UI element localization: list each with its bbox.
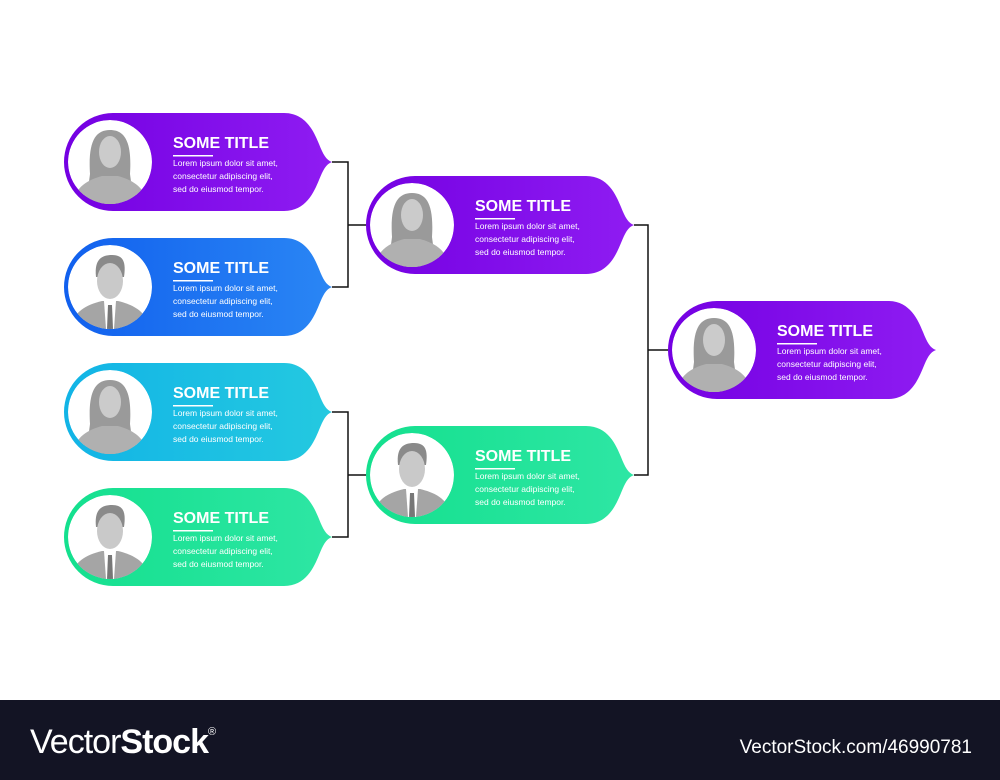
- card: left 2: consectetur adipiscing elit,: [173, 296, 273, 306]
- card: left 4: sed do eiusmod tempor.: [173, 559, 264, 569]
- card: left 1: sed do eiusmod tempor.: [173, 184, 264, 194]
- card: final: consectetur adipiscing elit,: [777, 359, 877, 369]
- card: left 2: SOME TITLE: [173, 260, 269, 277]
- card: left 2: Lorem ipsum dolor sit amet,: [173, 283, 278, 293]
- card: middle 2: Lorem ipsum dolor sit amet,: [475, 471, 580, 481]
- card: left 1: SOME TITLE: [173, 135, 269, 152]
- card: middle 1: SOME TITLE: [475, 198, 571, 215]
- card: left 2: sed do eiusmod tempor.: [173, 309, 264, 319]
- card: middle 2: SOME TITLE: [475, 448, 571, 465]
- card: final: SOME TITLE: [777, 323, 873, 340]
- card: middle 2: consectetur adipiscing elit,: [475, 484, 575, 494]
- card: middle 1: Lorem ipsum dolor sit amet,: [475, 221, 580, 231]
- card: middle 2: sed do eiusmod tempor.: [475, 497, 566, 507]
- footer bar: ®: [208, 726, 216, 738]
- card: left 3: sed do eiusmod tempor.: [173, 434, 264, 444]
- card: middle 2: [366, 426, 634, 524]
- card: left 1: [64, 113, 332, 211]
- card: left 4: Lorem ipsum dolor sit amet,: [173, 533, 278, 543]
- card: left 3: [64, 363, 332, 461]
- card: middle 1: [366, 176, 634, 274]
- card: final: Lorem ipsum dolor sit amet,: [777, 346, 882, 356]
- card: left 4: consectetur adipiscing elit,: [173, 546, 273, 556]
- card: final: sed do eiusmod tempor.: [777, 372, 868, 382]
- card: left 1: Lorem ipsum dolor sit amet,: [173, 158, 278, 168]
- card: final: [668, 301, 936, 399]
- card: middle 1: consectetur adipiscing elit,: [475, 234, 575, 244]
- card: left 3: SOME TITLE: [173, 385, 269, 402]
- card: left 3: Lorem ipsum dolor sit amet,: [173, 408, 278, 418]
- footer bar: [0, 700, 1000, 780]
- card: middle 1: sed do eiusmod tempor.: [475, 247, 566, 257]
- card: left 3: consectetur adipiscing elit,: [173, 421, 273, 431]
- connectors: [332, 162, 668, 537]
- footer bar: VectorStock: [30, 723, 208, 761]
- footer bar: VectorStock.com/46990781: [740, 737, 972, 758]
- card: left 4: SOME TITLE: [173, 510, 269, 527]
- card: left 4: [64, 488, 332, 586]
- card: left 2: [64, 238, 332, 336]
- card: left 1: consectetur adipiscing elit,: [173, 171, 273, 181]
